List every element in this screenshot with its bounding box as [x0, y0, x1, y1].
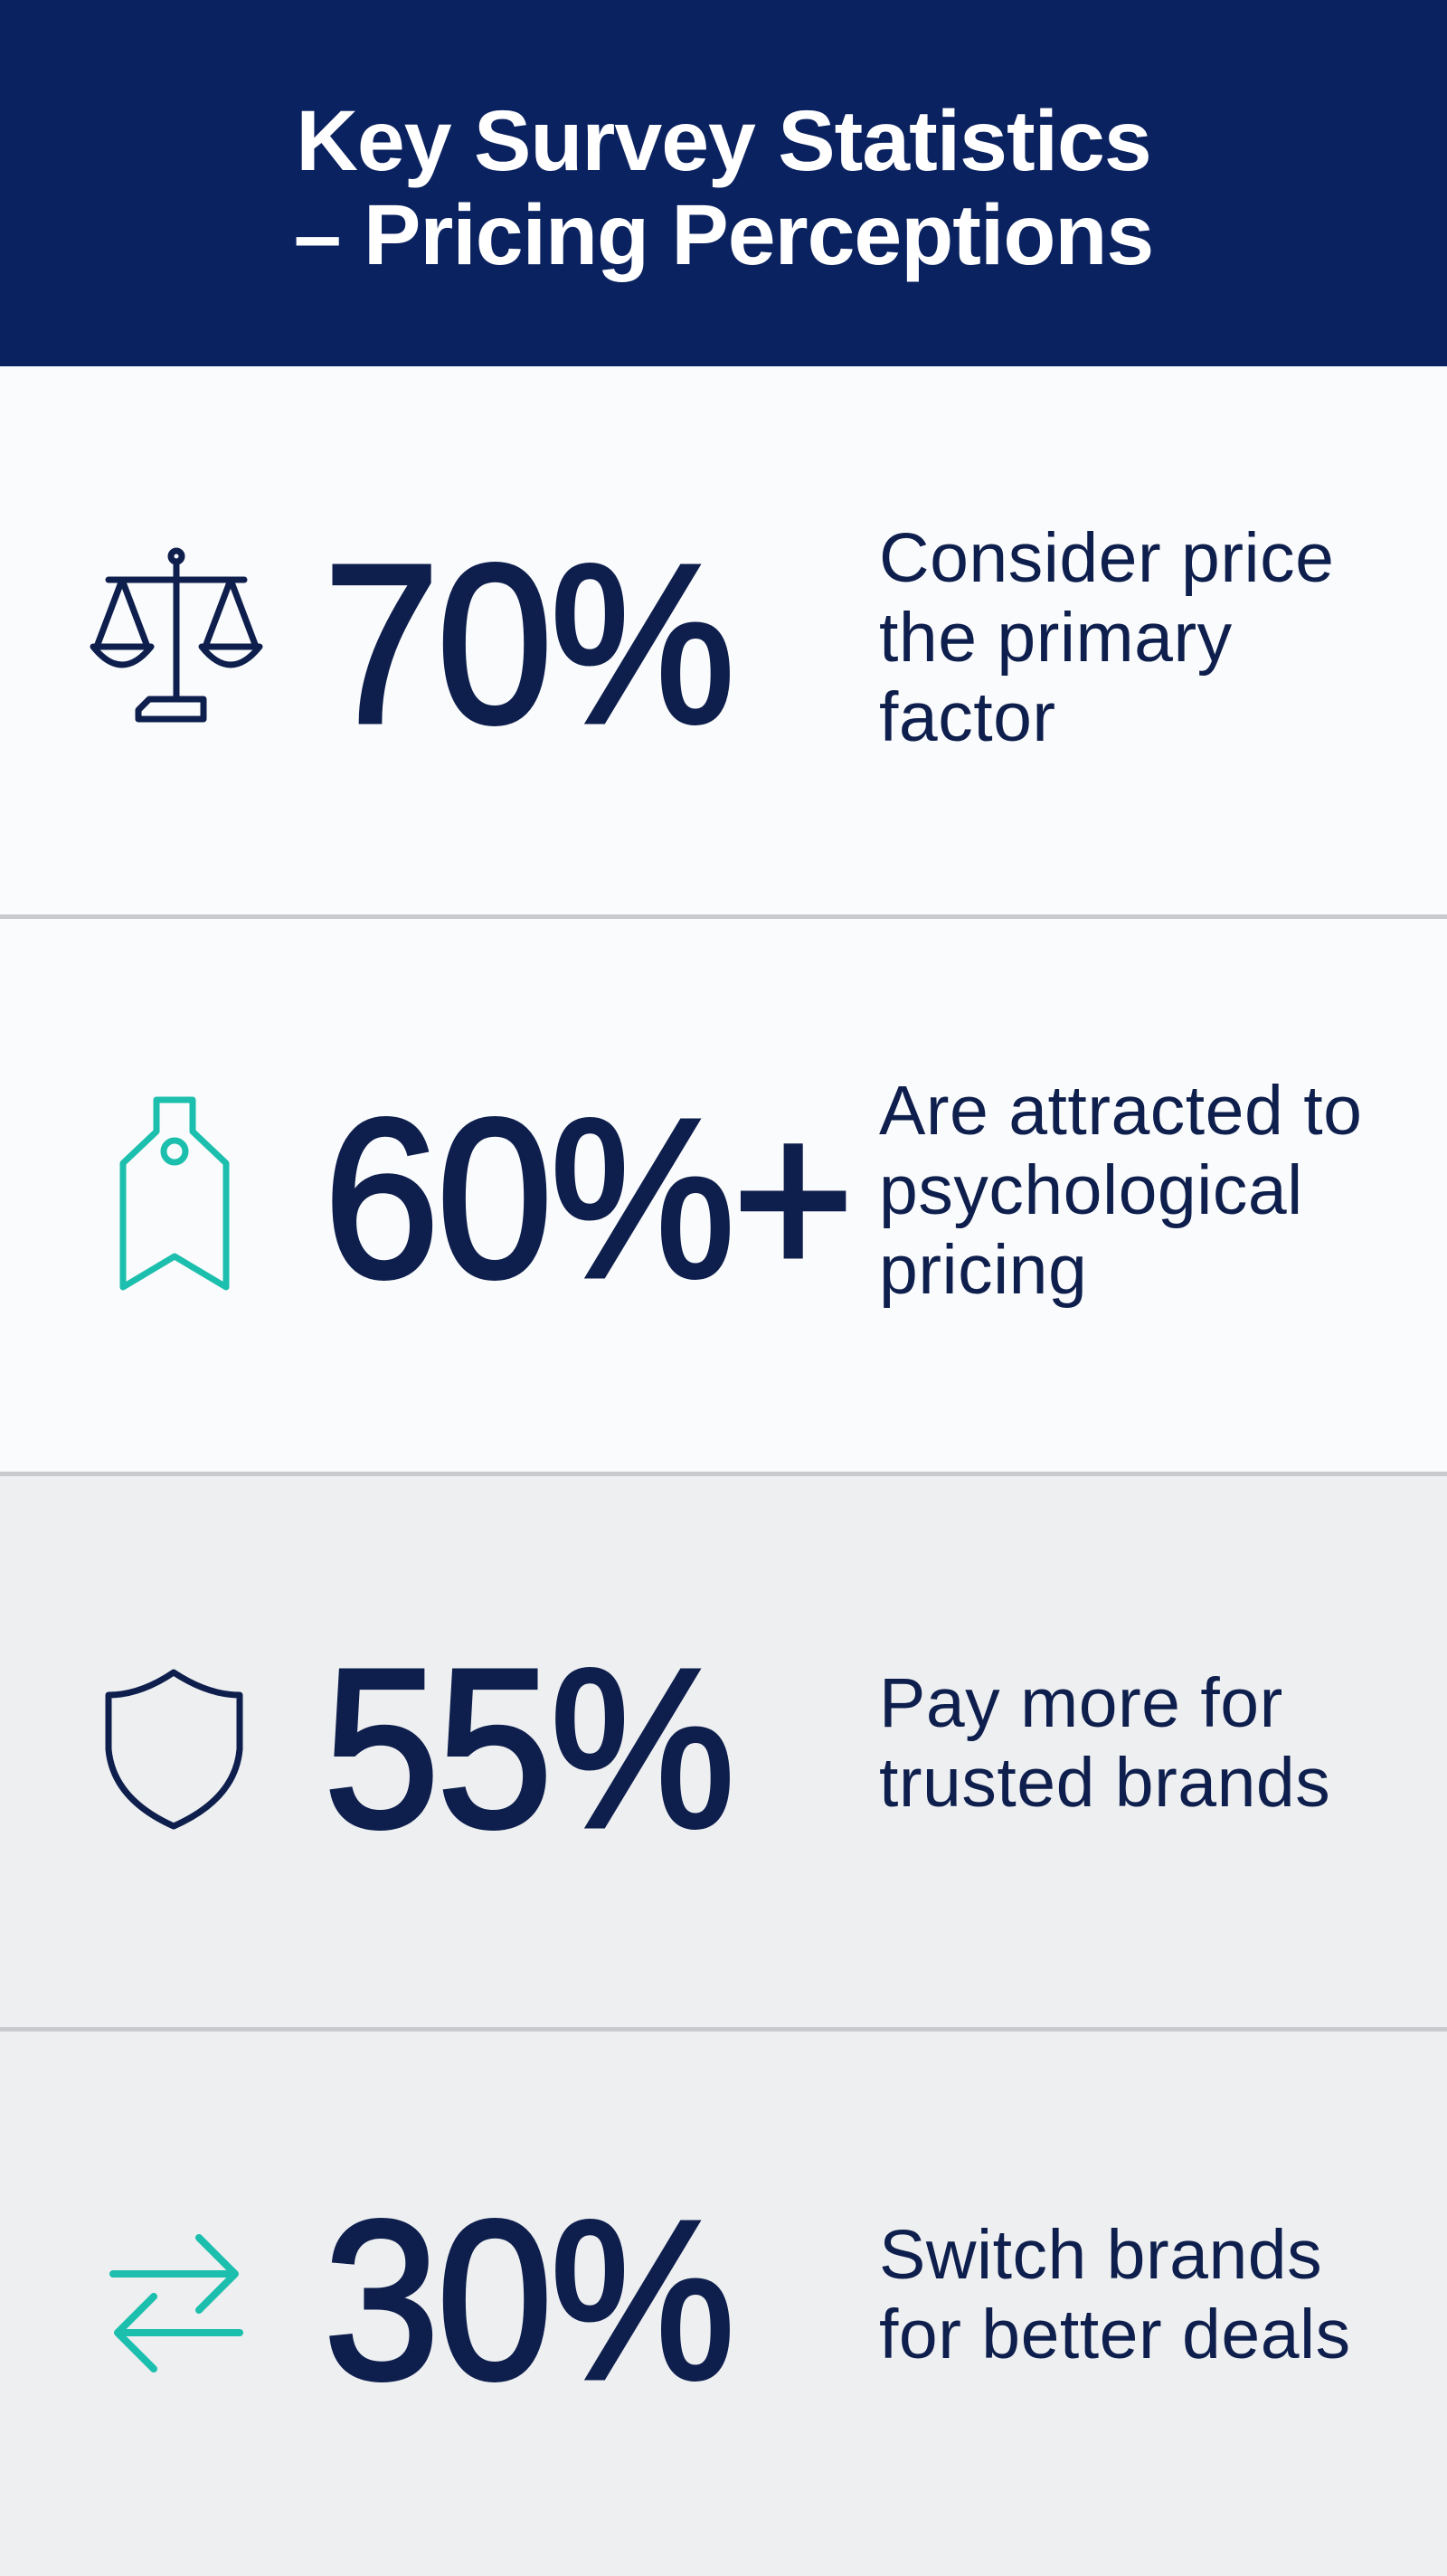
stat number: 70% [324, 517, 733, 770]
icon: shield [105, 1670, 242, 1829]
description: factor [879, 678, 1056, 756]
panel: 70% [0, 366, 1447, 916]
panel: 55% [0, 1476, 1447, 2027]
description [879, 1664, 1330, 1822]
description: Pay more for [879, 1664, 1283, 1742]
stat number: 55% [324, 1622, 733, 1874]
description: Are attracted to [879, 1072, 1362, 1150]
title: – Pricing Perceptions [294, 187, 1153, 283]
description: psychological [879, 1151, 1303, 1229]
icon: swap arrows [109, 2234, 243, 2372]
panel: 30% [0, 2031, 1447, 2576]
description: Switch brands [879, 2216, 1322, 2294]
description: the primary [879, 599, 1233, 677]
description: for better deals [879, 2296, 1351, 2373]
description: trusted brands [879, 1744, 1330, 1822]
header [0, 0, 1447, 366]
stat number: 30% [324, 2174, 733, 2426]
stat number: 60%+ [324, 1072, 852, 1324]
description: Consider price [879, 519, 1334, 597]
title: Key Survey Statistics [296, 93, 1151, 189]
description: pricing [879, 1231, 1087, 1309]
description [879, 519, 1334, 756]
icon: balance scale [90, 548, 262, 722]
description [879, 1072, 1362, 1309]
title [294, 93, 1153, 283]
panel: 60%+ [0, 919, 1447, 1472]
description [879, 2216, 1351, 2373]
icon: price tag [119, 1096, 230, 1290]
